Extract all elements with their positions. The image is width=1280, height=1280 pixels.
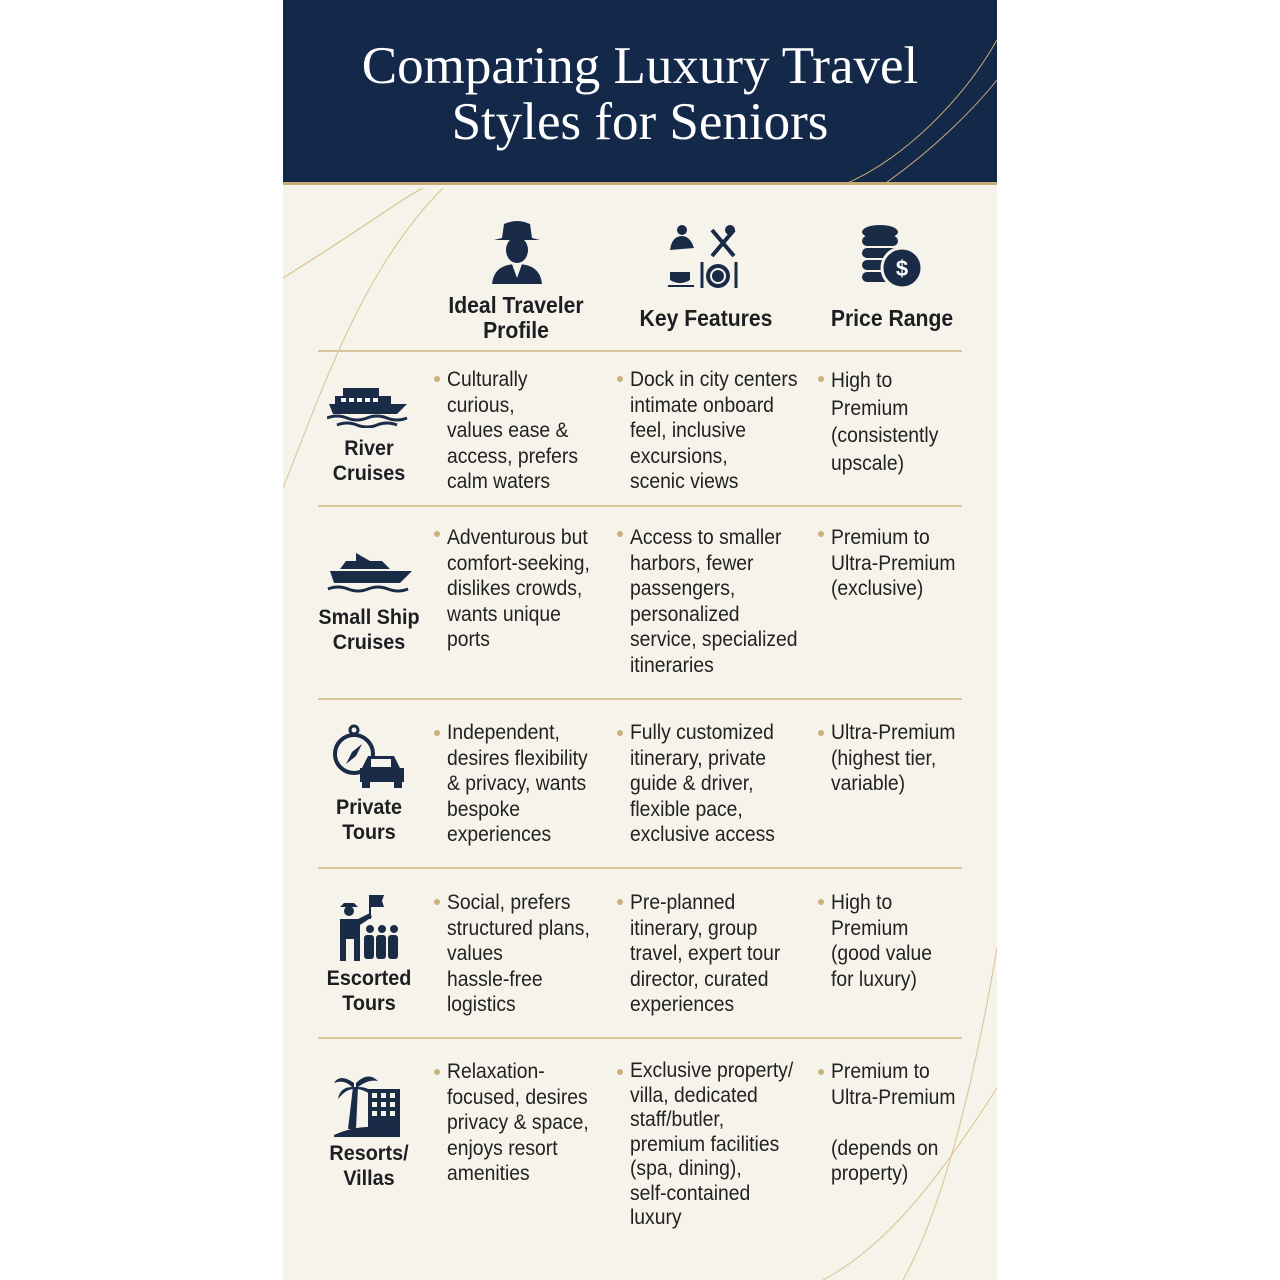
- text: features: [630, 526, 798, 676]
- title: Comparing Luxury Travel: [362, 37, 918, 95]
- heading: Price Range: Price Range: [831, 305, 953, 331]
- text: features: Access to smaller: [630, 526, 781, 549]
- text: features: experiences: [630, 993, 734, 1016]
- text: price: High to: [831, 891, 892, 914]
- text: features: director, curated: [630, 968, 769, 990]
- icon: features: [668, 225, 738, 288]
- row: Escorted Tours: [327, 891, 932, 1016]
- text: profile: [447, 891, 590, 1016]
- heading: Ideal Traveler Profile: [448, 292, 584, 343]
- text: profile: comfort-seeking,: [447, 552, 590, 574]
- label: Villas: [343, 1166, 395, 1190]
- text: features: [630, 891, 780, 1016]
- text: profile: Independent,: [447, 721, 560, 744]
- text: price: (consistently: [831, 424, 938, 447]
- label: Tours: [342, 820, 396, 844]
- text: price: (depends on: [831, 1136, 938, 1160]
- text: profile: [447, 1060, 589, 1185]
- text: price: [831, 721, 956, 795]
- text: features: flexible pace,: [630, 798, 743, 820]
- text: profile: Adventurous but: [447, 526, 588, 549]
- text: profile: access, prefers: [447, 444, 578, 468]
- text: features: exclusive access: [630, 823, 775, 846]
- title: Styles for Seniors: [452, 93, 828, 151]
- label: Cruises: [333, 461, 405, 485]
- text: price: Ultra-Premium: [831, 552, 956, 574]
- icon: river boat: [327, 388, 408, 428]
- text: profile: [447, 526, 590, 651]
- text: features: itinerary, private: [630, 746, 766, 770]
- title: [362, 37, 918, 151]
- text: profile: Culturally: [447, 368, 528, 391]
- row: Small Ship Cruises: [318, 526, 956, 676]
- text: profile: curious,: [447, 394, 515, 416]
- text: profile: experiences: [447, 823, 551, 846]
- text: price: [831, 1060, 956, 1185]
- text: features: Exclusive property/: [630, 1059, 793, 1082]
- text: price: High to: [831, 369, 892, 392]
- icon: coins: $: [896, 256, 908, 281]
- text: features: staff/butler,: [630, 1108, 724, 1131]
- text: price: (good value: [831, 942, 932, 965]
- text: profile: dislikes crowds,: [447, 577, 582, 600]
- text: features: self-contained: [630, 1182, 750, 1204]
- heading: Ideal Traveler Profile: Ideal Traveler: [448, 292, 584, 318]
- text: price: [831, 369, 938, 474]
- text: profile: amenities: [447, 1162, 530, 1185]
- text: price: (exclusive): [831, 577, 923, 600]
- text: features: passengers,: [630, 577, 735, 600]
- text: price: Premium: [831, 396, 908, 420]
- text: features: itineraries: [630, 654, 714, 676]
- icon: traveler: [492, 221, 542, 284]
- text: profile: bespoke: [447, 798, 520, 820]
- label: [333, 436, 405, 485]
- text: profile: hassle-free: [447, 968, 543, 990]
- text: profile: privacy & space,: [447, 1111, 589, 1134]
- text: price: [831, 526, 956, 600]
- text: price: Premium to: [831, 1060, 930, 1083]
- label: Small Ship: [318, 605, 420, 629]
- label: River: [344, 436, 394, 460]
- label: Private: [336, 795, 402, 819]
- text: features: excursions,: [630, 444, 728, 468]
- text: profile: values ease &: [447, 419, 568, 442]
- text: features: Fully customized: [630, 721, 774, 744]
- icon: compass and car: [333, 724, 404, 788]
- text: features: villa, dedicated: [630, 1084, 758, 1106]
- text: price: variable): [831, 772, 905, 795]
- text: features: personalized: [630, 602, 740, 626]
- text: features: guide & driver,: [630, 772, 754, 795]
- row: River Cruises: [327, 368, 938, 493]
- text: profile: structured plans,: [447, 916, 590, 940]
- text: features: [630, 1059, 794, 1229]
- text: features: intimate onboard: [630, 394, 774, 416]
- text: features: [630, 368, 797, 493]
- text: price: Ultra-Premium: [831, 721, 956, 744]
- text: profile: desires flexibility: [447, 746, 588, 770]
- text: features: (spa, dining),: [630, 1157, 742, 1180]
- label: [336, 795, 402, 844]
- icon: coins: [862, 225, 920, 286]
- label: Tours: [342, 991, 396, 1015]
- text: profile: values: [447, 942, 503, 965]
- label: [318, 605, 420, 654]
- text: price: Premium: [831, 916, 908, 940]
- icon: palm and building: [334, 1076, 400, 1137]
- row: Resorts/Villas: [329, 1059, 956, 1229]
- text: price: Premium to: [831, 526, 930, 549]
- text: profile: & privacy, wants: [447, 772, 586, 795]
- text: profile: Relaxation-: [447, 1060, 545, 1083]
- label: Cruises: [333, 630, 405, 654]
- text: features: scenic views: [630, 470, 738, 493]
- text: profile: ports: [447, 628, 490, 651]
- text: features: travel, expert tour: [630, 942, 780, 965]
- text: features: luxury: [630, 1206, 682, 1229]
- text: features: service, specialized: [630, 628, 798, 651]
- text: price: (highest tier,: [831, 746, 936, 770]
- text: profile: Social, prefers: [447, 891, 570, 914]
- text: profile: [447, 368, 578, 493]
- label: [327, 966, 411, 1015]
- text: features: [630, 721, 775, 846]
- text: features: premium facilities: [630, 1132, 779, 1156]
- text: price: upscale): [831, 452, 904, 474]
- icon: guide with group: [340, 895, 398, 961]
- header: [283, 0, 997, 185]
- text: profile: [447, 721, 588, 846]
- text: features: feel, inclusive: [630, 419, 746, 442]
- label: [329, 1141, 409, 1190]
- text: features: itinerary, group: [630, 916, 757, 940]
- text: price: [831, 891, 932, 990]
- text: price: for luxury): [831, 968, 917, 990]
- text: profile: calm waters: [447, 470, 550, 493]
- text: price: property): [831, 1162, 908, 1185]
- text: profile: enjoys resort: [447, 1136, 558, 1160]
- row: Private Tours: [333, 721, 956, 846]
- text: profile: logistics: [447, 993, 516, 1016]
- text: features: Pre-planned: [630, 891, 735, 914]
- text: profile: wants unique: [447, 602, 561, 626]
- label: Escorted: [327, 966, 411, 990]
- text: features: Dock in city centers: [630, 368, 797, 391]
- heading: Key Features: Key Features: [640, 305, 772, 331]
- heading: Ideal Traveler Profile: Profile: [483, 317, 549, 343]
- text: profile: focused, desires: [447, 1086, 588, 1108]
- icon: yacht: [328, 553, 412, 592]
- label: Resorts/: [329, 1141, 409, 1165]
- text: price: Ultra-Premium: [831, 1086, 956, 1108]
- text: features: harbors, fewer: [630, 552, 753, 574]
